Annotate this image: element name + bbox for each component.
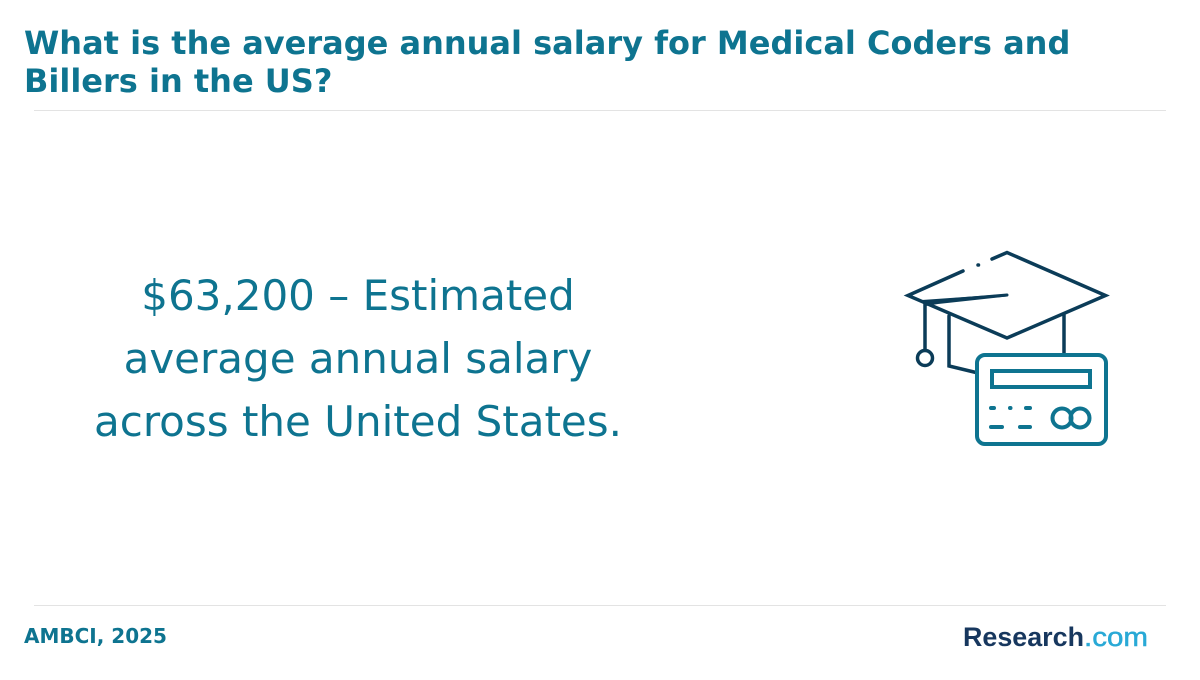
statistic text: across the United States. — [94, 397, 622, 446]
statistic text: average annual salary — [124, 334, 592, 383]
statistic text — [94, 271, 622, 446]
logo: Research.com: .com — [1084, 622, 1148, 652]
title: Billers in the US? — [24, 62, 332, 100]
logo: Research.com — [963, 622, 1148, 652]
source: AMBCI, 2025 — [24, 624, 167, 648]
statistic text: $63,200 – Estimated — [141, 271, 575, 320]
title: What is the average annual salary for Medical Coders and — [24, 24, 1070, 62]
logo: Research.com: Research — [963, 622, 1084, 652]
icon: graduation cap with payment card — [904, 250, 1110, 446]
title — [24, 24, 1070, 100]
